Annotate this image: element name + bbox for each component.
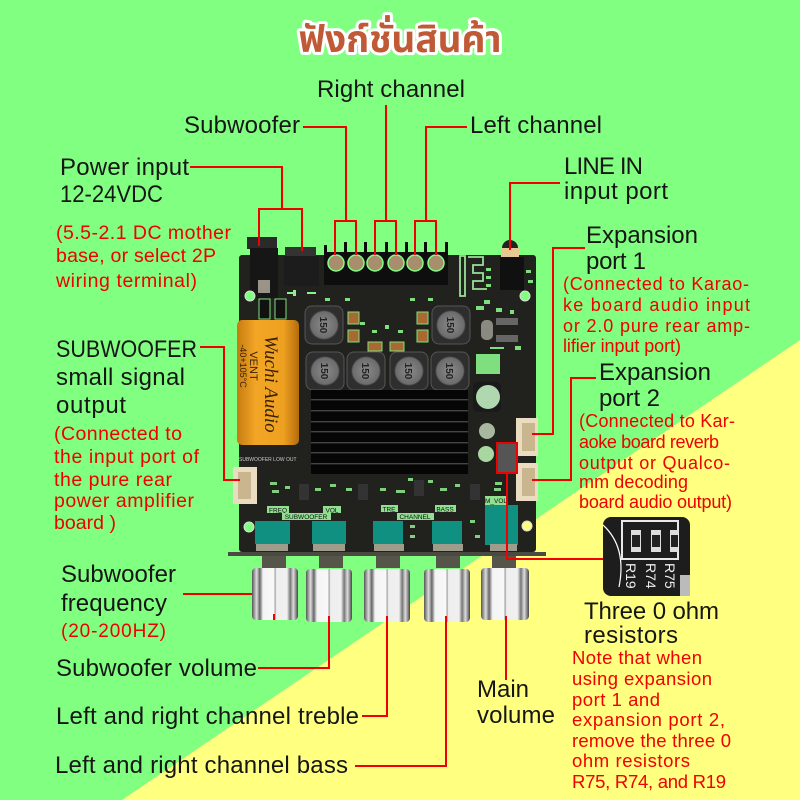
DC power jack [247,237,278,298]
label: power input: Power input [60,154,189,181]
silk labels: potentiometers: M_VOL [485,498,507,505]
note: frequency range: (20-200HZ) [61,621,166,642]
label: subwoofer frequency: frequency [61,590,167,617]
inductors: 150 [359,363,370,380]
note: expansion port 2: aoke board reverb [579,432,719,452]
note: subwoofer output [54,423,200,534]
note: power input: wiring terminal) [55,270,197,292]
mounting holes [244,291,532,532]
label: subwoofer small signal output: output [56,392,126,419]
label: main volume: volume [477,702,555,729]
orange capacitor [237,320,299,445]
note: resistor removal: port 1 and [572,689,660,710]
label: subwoofer frequency: Subwoofer [61,561,176,588]
note: power input [55,222,232,292]
small pads [270,478,502,538]
expansion port 1 leader [532,248,585,434]
subwoofer frequency leader [183,594,274,620]
leader lines [183,105,603,766]
label: subwoofer small signal output: small signal [56,364,185,391]
inductors: 150 [443,363,454,380]
knobs [252,568,529,622]
label: subwoofer: Subwoofer [184,112,300,139]
note: subwoofer output: board ) [54,512,116,534]
orange capacitor: Wuchi Audio [260,335,281,433]
note: subwoofer output: power amplifier [54,490,194,512]
note: expansion port 1: (Connected to Karao- [563,274,749,294]
op-amp ICs [299,480,480,500]
line in jack [500,240,524,290]
label: expansion port 2: Expansion [599,359,711,386]
label: subwoofer frequency [61,561,176,617]
subwoofer volume leader [258,616,329,668]
label: line in: input port [564,178,668,205]
silk labels: potentiometers: SUBWOOFER [285,514,328,521]
front metal plate [228,552,546,556]
label: power input [60,154,189,208]
label: main volume: Main [477,676,529,703]
left connector [233,467,257,504]
terminal screws [328,255,444,271]
label: power input: 12-24VDC [60,181,163,208]
title: ฟังก์ชั่นสินค้า [298,14,502,60]
inductors: 150 [317,317,328,334]
SMD pads top [325,268,533,350]
label: expansion port 1: Expansion [586,222,698,249]
right connector 1 [516,418,538,456]
label: expansion port 2 [599,359,711,412]
inductors: 150 [444,317,455,334]
label: line in [564,153,668,205]
2P terminal [284,247,319,296]
heatsink [311,390,468,474]
silk labels: potentiometers: BASS [436,506,454,514]
right channel leader [375,105,396,255]
note: resistor removal: using expansion [572,668,712,689]
label: right channel: Right channel [317,76,465,103]
note: subwoofer output: the pure rear [54,469,172,491]
label: subwoofer small signal output [56,336,197,419]
knob shafts [262,556,516,568]
label: treble: Left and right channel treble [56,703,359,730]
note: expansion port 1: lifier input port) [563,336,681,356]
note: expansion port 2: board audio output) [579,492,732,512]
silk label: subwoofer low out: SUBWOOFER LOW OUT [239,457,296,463]
label: left channel: Left channel [470,112,602,139]
label: bass: Left and right channel bass [55,752,348,779]
silk labels: potentiometers: TRE [382,506,396,514]
background: yellow corner [122,340,800,800]
crystal and ICs [481,318,518,342]
label: subwoofer volume: Subwoofer volume [56,655,257,682]
silk labels: potentiometers: VOL [325,508,339,514]
note: subwoofer output: the input port of [54,446,200,468]
note: expansion port 1: or 2.0 pure rear amp- [563,316,750,336]
label: three 0 ohm resistors [584,598,719,649]
antenna trace [460,256,487,296]
resistor inset leader [507,473,603,559]
line in leader [510,183,560,250]
silk labels: potentiometers [267,496,508,521]
inset photo: three 0 ohm resistors [603,517,690,596]
note: expansion port 1: ke board audio input [563,295,750,315]
note: expansion port 1 [563,274,750,356]
silk labels: potentiometers: CHANNEL [399,514,431,521]
PCB [239,255,536,552]
note: expansion port 2: mm decoding [579,472,688,492]
subwoofer leader [303,127,356,255]
silk labels: potentiometers: FREQ [269,508,287,514]
note: subwoofer output: (Connected to [54,423,182,445]
main volume leader [505,616,507,680]
resistor box [497,443,517,473]
potentiometers [255,505,518,551]
amplifier circuit board [228,237,546,622]
left channel leader [415,127,467,255]
inset photo: three 0 ohm resistors: R74 [643,563,659,589]
resistor group [497,443,517,473]
note: resistor removal: R75, R74, and R19 [572,771,726,792]
note: expansion port 2: (Connected to Kar- [579,411,735,431]
inset photo: three 0 ohm resistors: R19 [623,563,639,589]
label: expansion port 1 [586,222,698,275]
label: expansion port 2: port 2 [599,385,660,412]
inset photo: three 0 ohm resistors: R75 [662,563,678,589]
diodes [259,299,286,319]
note: power input: (5.5-2.1 DC mother [56,222,232,244]
orange capacitor: -40+105°C [238,344,248,388]
subwoofer output leader [200,347,240,480]
label: line in: LINE IN [564,153,643,180]
right connector 2 [516,463,538,501]
small capacitors near inductors [348,312,428,351]
power input leader [190,167,302,251]
note: resistor removal: remove the three 0 [572,730,731,751]
inductors: 150 [402,363,413,380]
note: resistor removal [572,647,731,792]
inductors: 150 [318,363,329,380]
orange capacitor: VENT [247,351,259,381]
label: subwoofer small signal output: SUBWOOFER [56,336,197,363]
note: expansion port 2: output or Qualco- [579,453,730,473]
note: resistor removal: ohm resistors [572,750,690,771]
treble leader [362,616,387,716]
expansion port 2 leader [532,378,596,480]
bass leader [355,616,446,766]
electrolytic capacitors [473,382,501,462]
label: expansion port 1: port 1 [586,248,646,275]
label: three 0 ohm resistors: resistors [584,622,678,649]
note: resistor removal: Note that when [572,647,702,668]
note: expansion port 2 [579,411,735,512]
inductors [305,306,470,390]
label: main volume [477,676,555,729]
note: power input: base, or select 2P [56,245,216,267]
note: resistor removal: expansion port 2, [572,709,725,730]
green pad block [476,354,500,374]
screw terminal block [324,242,448,285]
label: three 0 ohm resistors: Three 0 ohm [584,598,719,625]
